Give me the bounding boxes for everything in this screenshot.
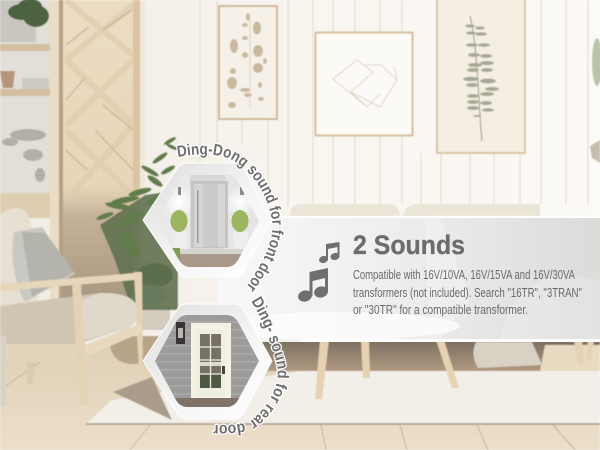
- wooden door: [50, 0, 145, 300]
- hanging plant and lamp: [590, 38, 600, 163]
- plant: [96, 136, 178, 310]
- table top seen through panel: [210, 312, 460, 340]
- art frame: leaves: [219, 6, 277, 119]
- front door photo: [166, 175, 259, 267]
- art frame: fern: [437, 0, 525, 153]
- hexagon: front door: [143, 163, 272, 277]
- icon: large music note: [297, 268, 329, 303]
- shelves: [0, 0, 50, 218]
- info panel: [210, 216, 600, 342]
- curved label: rear door: Ding- sound for rear door: [212, 295, 290, 438]
- planter and basket: [110, 305, 170, 364]
- panel heading: 2 Sounds: [353, 230, 465, 260]
- panel body text: or "30TR" for a compatible transformer.: [353, 303, 528, 317]
- floor cushion: [113, 377, 172, 420]
- panel body text: [353, 268, 582, 317]
- wall: [0, 0, 600, 360]
- art frame: geometric: [316, 32, 412, 136]
- curved label: front door: Ding-Dong sound for front door: [176, 142, 284, 293]
- sofa: [290, 204, 540, 216]
- armchair: [0, 208, 143, 407]
- rear door photo: [155, 315, 259, 407]
- rug: [86, 371, 600, 425]
- table and sofa legs: [315, 340, 594, 399]
- icon: small music note: [318, 242, 340, 264]
- blanket: [473, 342, 542, 368]
- hexagon: rear door: [143, 304, 272, 419]
- floor: [0, 340, 600, 450]
